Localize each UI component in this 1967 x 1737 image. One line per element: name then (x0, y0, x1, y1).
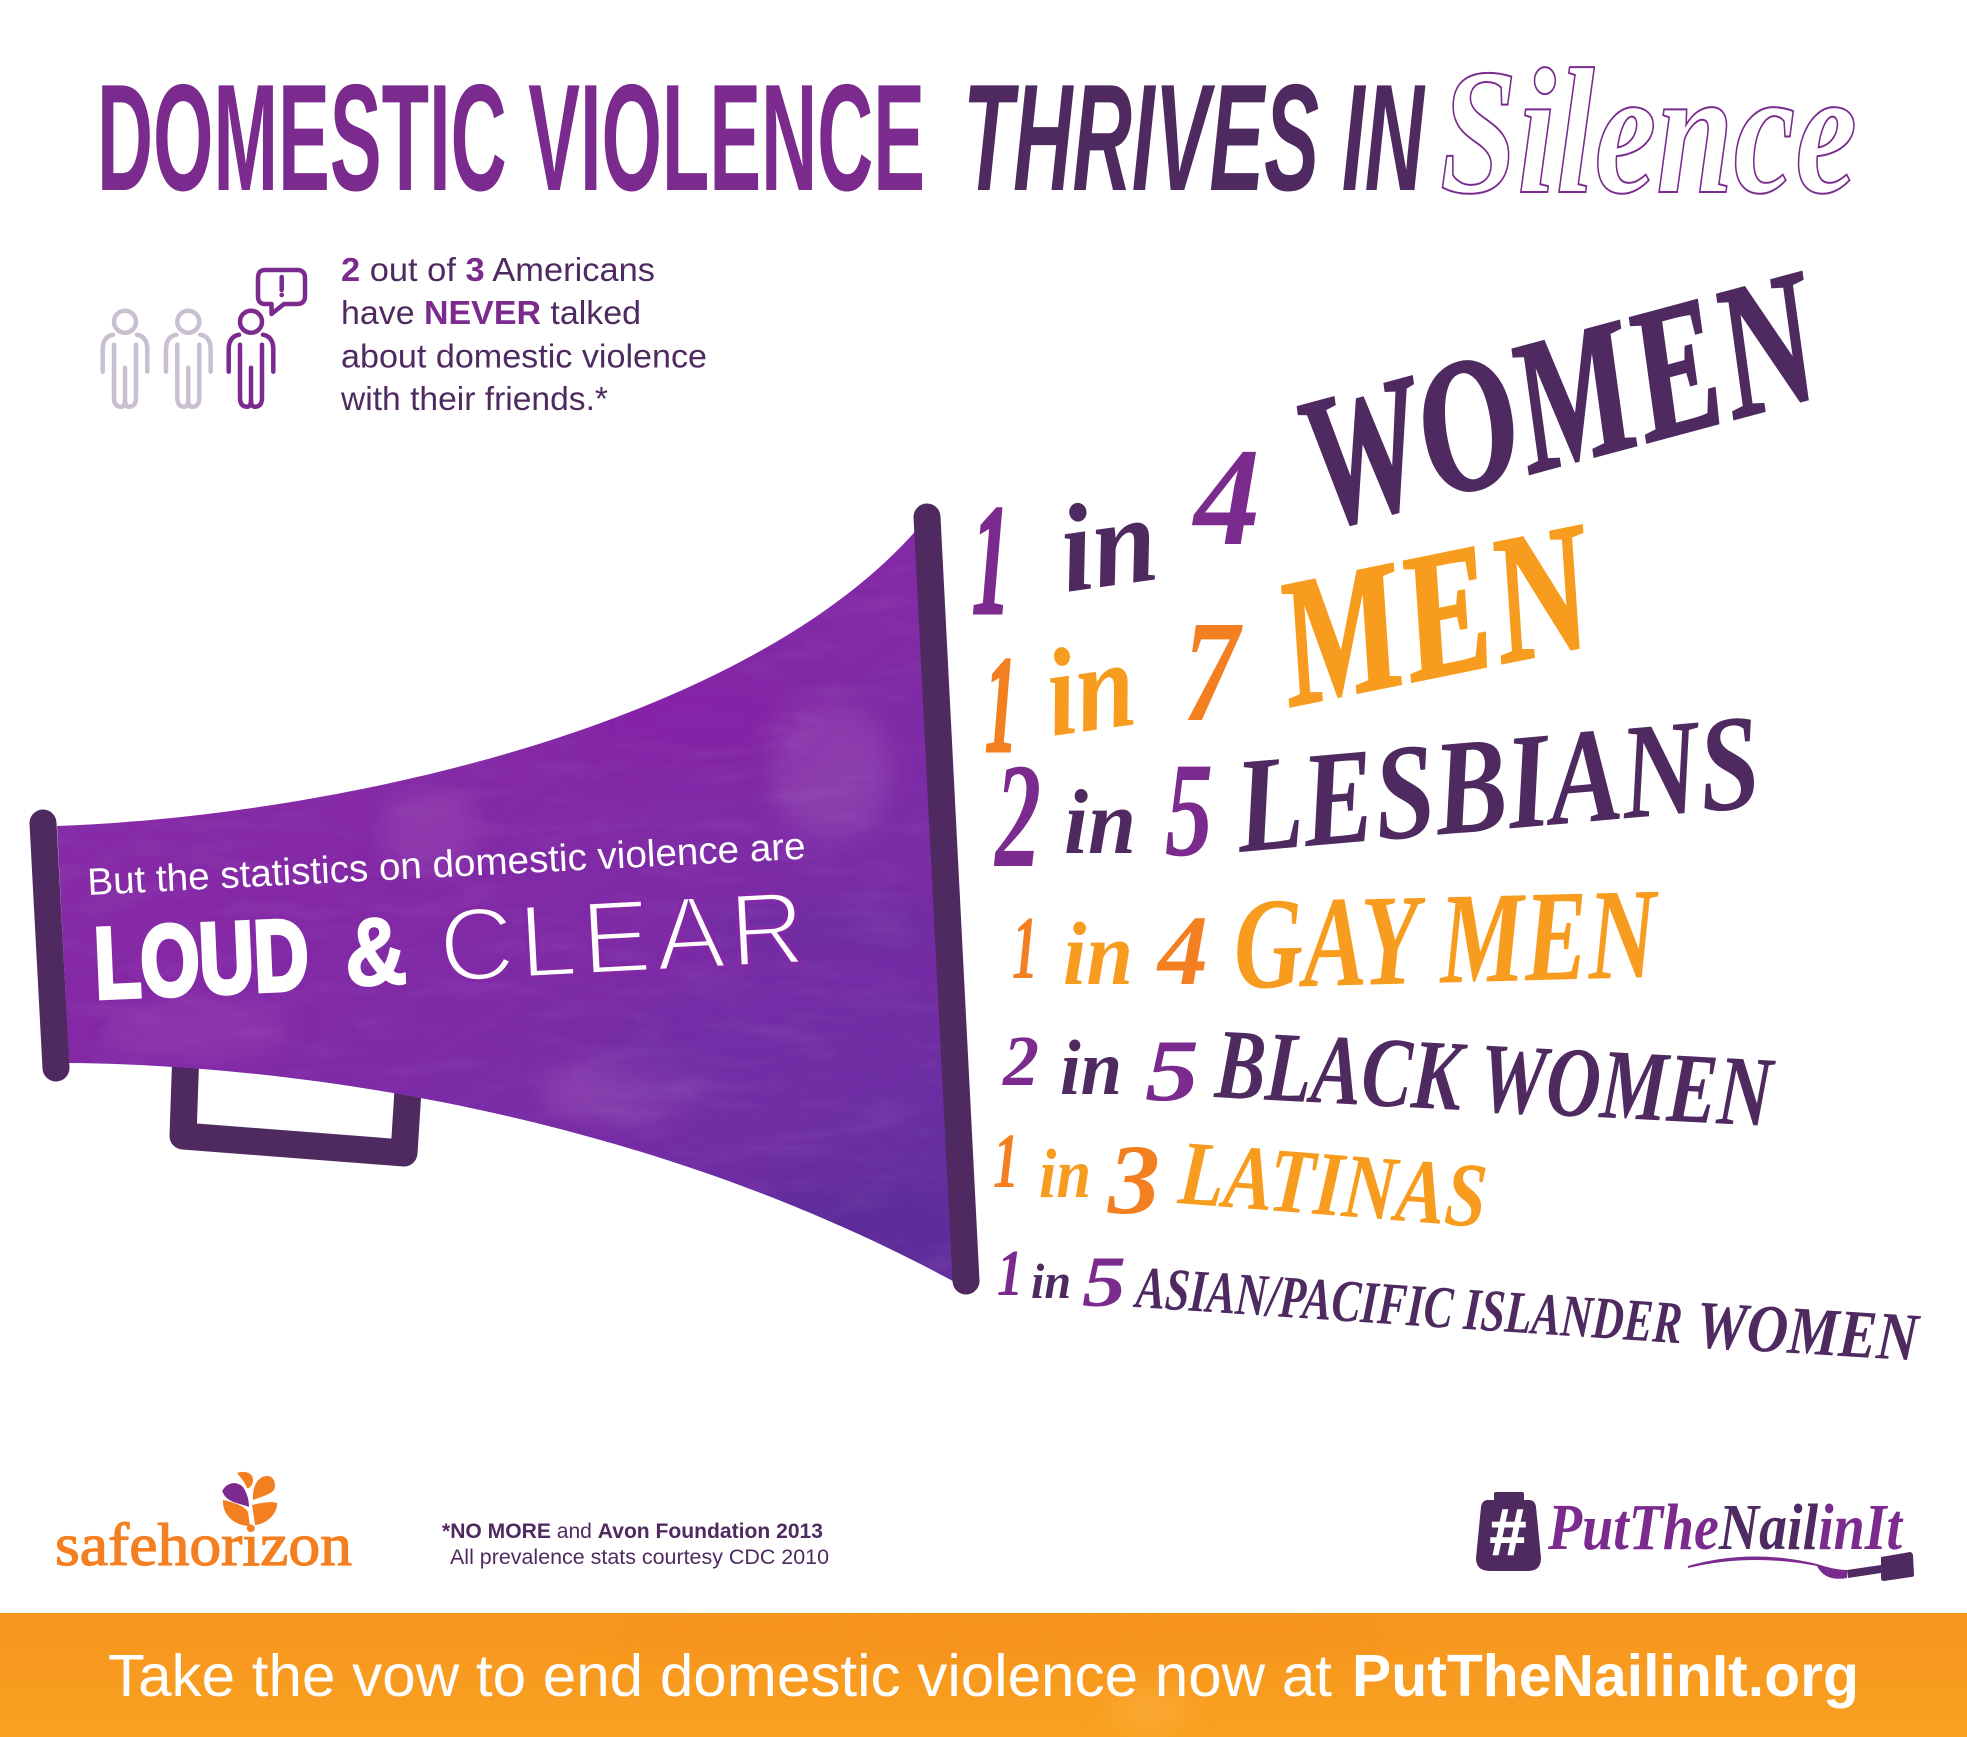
statistic: 1 in 5 asian/pacific islander women: 5 (1082, 1242, 1126, 1322)
statistic: 1 in 5 asian/pacific islander women: ASIAN/PACIFIC ISLANDER (1131, 1254, 1684, 1356)
megaphone mouth bar (43, 823, 56, 1068)
statistic: 2 in 5 lesbians: 2 (994, 733, 1041, 899)
statistic: 1 in 4 women: 1 (972, 473, 1010, 648)
statistic: 1 in 4 gay men (1012, 862, 1662, 1017)
statistic: 1 in 5 asian/pacific islander women: in (1031, 1253, 1071, 1309)
statistic: 2 in 5 black women: BLACK WOMEN (1212, 1008, 1778, 1148)
megaphone bell rim (927, 517, 966, 1281)
icon: three people with speech bubble (103, 270, 305, 407)
megaphone (40, 510, 980, 1300)
text block: 2 out of 3 Americans: have NEVER talked (341, 294, 641, 331)
statistic: 2 in 5 black women: 5 (1145, 1023, 1199, 1120)
statistic: 1 in 4 gay men: 1 (1012, 899, 1038, 998)
megaphone caption: But the statistics on domestic violence are (86, 826, 807, 904)
text block: 2 out of 3 Americans (340, 251, 707, 417)
statistic: 1 in 4 gay men: GAY MEN (1232, 862, 1662, 1017)
statistic: 1 in 5 asian/pacific islander women: WOMEN (1694, 1286, 1923, 1376)
statistic: 1 in 3 latinas: LATINAS (1175, 1121, 1490, 1247)
statistic: 1 in 7 men: 7 (1183, 592, 1243, 752)
text block: 2 out of 3 Americans: about domestic violence (341, 338, 707, 374)
statistic: 1 in 3 latinas: 3 (1107, 1124, 1160, 1235)
hashtag: PutTheNailinIt: PutTheNailinIt (1547, 1491, 1903, 1564)
statistic: 2 in 5 black women: in (1060, 1024, 1122, 1111)
banner: call to action: Take the vow to end domestic violence now at (108, 1643, 1332, 1709)
statistic: 2 in 5 lesbians (994, 687, 1766, 899)
statistic: 1 in 7 men: 1 (985, 628, 1017, 781)
title: Silence (1440, 32, 1857, 231)
statistic: 1 in 3 latinas (993, 1117, 1490, 1247)
footnote: sources: *NO MORE and Avon Foundation 2013 (442, 1520, 823, 1543)
statistic: 1 in 4 gay men: in (1063, 905, 1133, 1004)
statistic: 2 in 5 black women (1002, 1008, 1778, 1148)
CLEAR: CLEAR (436, 870, 808, 1005)
statistic: 2 in 5 black women: 2 (1002, 1021, 1039, 1101)
statistic: 2 in 5 lesbians: LESBIANS (1229, 687, 1766, 882)
hashtag: PutTheNailinIt: # (1490, 1495, 1526, 1569)
megaphone horn with watercolor texture (40, 510, 980, 1300)
statistic: 2 in 5 lesbians: 5 (1165, 736, 1213, 885)
statistic: 1 in 7 men: MEN (1258, 484, 1614, 746)
statistic: 1 in 3 latinas: 1 (993, 1117, 1019, 1204)
icon: nail polish brush stroke (1688, 1556, 1847, 1579)
banner: call to action: PutTheNailinIt.org (1352, 1643, 1859, 1709)
statistic: 1 in 4 gay men: 4 (1156, 895, 1208, 1006)
statistic: 1 in 5 asian/pacific islander women: 1 (997, 1237, 1023, 1310)
banner: call to action (0, 1613, 1967, 1737)
title: THRIVES IN (963, 53, 1426, 223)
title: DOMESTIC VIOLENCE (97, 53, 925, 223)
logo: safe horizon: safehorizon (55, 1512, 352, 1578)
footnote: sources: All prevalence stats courtesy CDC 2010 (450, 1546, 829, 1569)
statistic: 2 in 5 lesbians: in (1064, 771, 1136, 873)
footnote: sources (442, 1520, 829, 1569)
statistic: 1 in 4 women: in (1051, 470, 1165, 620)
statistic: 1 in 7 men (985, 484, 1614, 781)
statistic: 1 in 4 women: 4 (1191, 420, 1260, 575)
statistic: 1 in 7 men: in (1037, 615, 1143, 764)
text block: 2 out of 3 Americans: with their friends.* (340, 380, 608, 417)
text block: 2 out of 3 Americans: 2 out of 3 Americans (341, 251, 655, 288)
logo: safe horizon (55, 1472, 352, 1578)
LOUD: LOUD (92, 899, 311, 1020)
hashtag: PutTheNailinIt (1476, 1491, 1914, 1581)
statistic: 1 in 5 asian/pacific islander women (997, 1237, 1923, 1376)
statistic: 1 in 4 women (972, 230, 1845, 648)
statistic: 1 in 3 latinas: in (1039, 1136, 1091, 1213)
icon: nail polish bottle (1476, 1492, 1541, 1571)
megaphone handle (183, 1050, 408, 1153)
ampersand: & (342, 897, 409, 1007)
